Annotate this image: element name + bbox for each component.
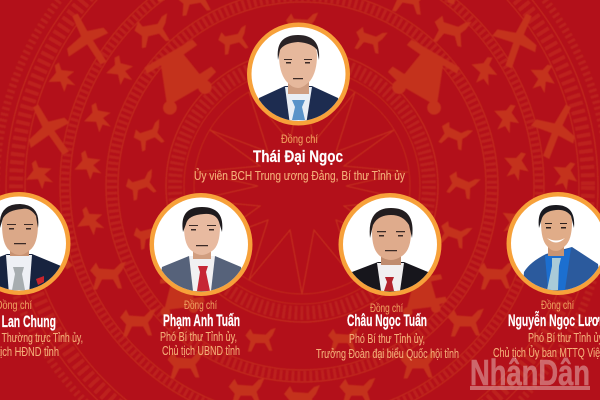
caption: Thái Đại Ngọc: Ủy viên BCH Trung ương Đảng, Bí thư Tỉnh ủy [194, 168, 405, 183]
portrait: Thái Đại Ngọc [247, 22, 350, 126]
portrait: Nguyễn Ngọc Lương [506, 192, 600, 295]
portrait: Rah Lan Chung [0, 192, 70, 295]
caption: Nguyễn Ngọc Lương: Đồng chí [541, 298, 574, 312]
caption: Thái Đại Ngọc: Thái Đại Ngọc [253, 147, 343, 166]
caption: Châu Ngọc Tuấn: Phó Bí thư Tỉnh ủy, [349, 331, 425, 346]
caption: Phạm Anh Tuấn: Phó Bí thư Tỉnh ủy, [160, 329, 237, 344]
caption: Phạm Anh Tuấn: Đồng chí [184, 298, 217, 312]
portrait: Châu Ngọc Tuấn [338, 193, 442, 296]
caption: Châu Ngọc Tuấn: Châu Ngọc Tuấn [347, 311, 427, 330]
caption: Thái Đại Ngọc: Đồng chí [281, 132, 319, 146]
caption: Phạm Anh Tuấn: Phạm Anh Tuấn [163, 311, 240, 330]
caption: Thái Đại Ngọc [194, 132, 405, 183]
caption: Châu Ngọc Tuấn: Trưởng Đoàn đại biểu Quốc hội tỉnh [316, 346, 459, 361]
portrait: Phạm Anh Tuấn [150, 193, 252, 296]
caption: Phạm Anh Tuấn [160, 298, 240, 358]
caption: Châu Ngọc Tuấn: Đồng chí [370, 301, 403, 315]
caption: Châu Ngọc Tuấn [316, 301, 459, 361]
caption: Phạm Anh Tuấn: Chủ tịch UBND tỉnh [162, 343, 240, 358]
caption: Nguyễn Ngọc Lương [493, 298, 600, 360]
caption: Rah Lan Chung [0, 298, 83, 359]
